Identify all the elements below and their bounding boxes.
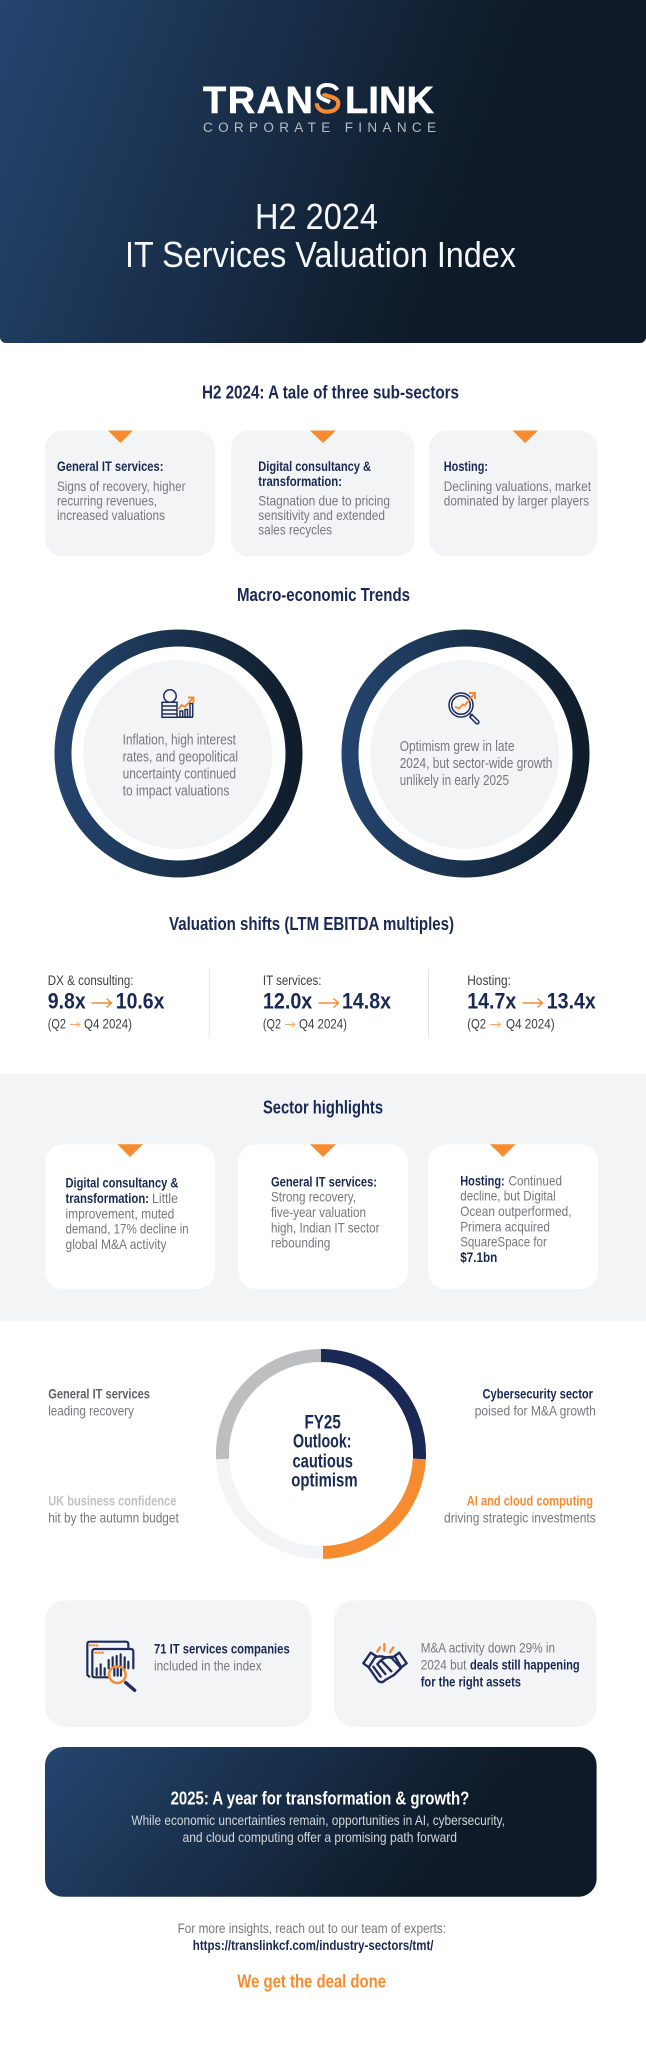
metric: DX and consulting: DX & consulting: — [48, 972, 133, 988]
panel: sub-sector cards — [45, 430, 598, 556]
icon: chart windows with magnifier — [87, 1642, 135, 1690]
text: donut centre — [291, 1412, 358, 1492]
card: digital consultancy: Stagnation due to pricing — [258, 492, 390, 508]
metric: DX and consulting — [48, 972, 165, 1032]
label: cybersecurity sector: Cybersecurity sector — [482, 1386, 593, 1402]
text: M&A stat: deals still happening — [470, 1657, 580, 1673]
label: general IT services: leading recovery — [48, 1402, 134, 1418]
card: general IT services: recurring revenues, — [57, 492, 157, 508]
card: digital consultancy: sensitivity and extended — [258, 507, 385, 523]
panel: valuation multiples — [48, 969, 596, 1038]
card: general IT highlight: rebounding — [271, 1235, 330, 1251]
text: donut centre: cautious — [292, 1450, 353, 1472]
card: general IT services: increased valuations — [57, 507, 165, 523]
tagline: We get the deal done — [237, 1972, 386, 1992]
metric: IT services: (Q2 — [263, 1016, 281, 1032]
text: 2025 body: and cloud computing offer a promising path forward — [182, 1829, 457, 1845]
panel: 2025 call to action — [45, 1747, 597, 1897]
text: contact: https://translinkcf.com/industry-sectors/tmt/ — [193, 1937, 434, 1953]
text: optimism: 2024, but sector-wide growth — [400, 756, 552, 772]
logo: Translink Corporate Finance: LINK — [345, 80, 435, 122]
card: hosting highlight: Ocean outperformed, — [460, 1203, 572, 1219]
label: cybersecurity sector — [475, 1386, 596, 1418]
metric: hosting: 13.4x — [547, 989, 596, 1014]
metric: IT services: IT services: — [263, 972, 321, 988]
card: digital consultancy highlight: Digital consultancy & — [66, 1175, 178, 1191]
metric: hosting: Q4 2024) — [506, 1016, 555, 1032]
card: hosting highlight: Primera acquired — [460, 1218, 550, 1234]
heading: valuation shifts: Valuation shifts (LTM EBITDA multiples) — [169, 914, 454, 934]
text: M&A stat: for the right assets — [421, 1674, 521, 1690]
card: general IT services: Signs of recovery, higher — [57, 478, 186, 494]
text: contact: For more insights, reach out to our team of experts: — [178, 1920, 446, 1936]
heading: macro-economic trends: Macro-economic Trends — [237, 585, 410, 605]
label: general IT services: General IT services — [48, 1386, 150, 1402]
panel: M&A activity stat — [334, 1600, 597, 1727]
card: hosting: Hosting: — [444, 458, 488, 474]
card: general IT services: General IT services: — [57, 458, 164, 474]
card: general IT highlight: five-year valuation — [271, 1204, 366, 1220]
label: UK business confidence: hit by the autumn budget — [48, 1510, 179, 1526]
title — [125, 196, 516, 275]
text: M&A stat — [421, 1640, 580, 1690]
panel: macro circle left — [63, 638, 294, 869]
logo: Translink Corporate Finance: TRAN — [203, 80, 313, 122]
logo: Translink Corporate Finance — [203, 80, 436, 135]
card: digital consultancy — [231, 430, 414, 556]
text: inflation: to impact valuations — [123, 783, 229, 799]
panel: header banner — [0, 0, 646, 343]
card: hosting: Declining valuations, market — [444, 478, 591, 494]
metric: IT services: 12.0x — [263, 989, 313, 1014]
text: companies stat — [154, 1641, 290, 1674]
heading: tale of three sub-sectors: H2 2024: A tale of three sub-sectors — [202, 382, 459, 402]
panel: companies stat — [45, 1600, 312, 1727]
icon: handshake — [363, 1644, 407, 1682]
label: AI and cloud computing: driving strategic investments — [444, 1510, 596, 1526]
text: inflation: Inflation, high interest — [123, 732, 236, 748]
metric: DX and consulting: Q4 2024) — [84, 1016, 132, 1032]
card: hosting highlight: Continued — [508, 1172, 562, 1188]
text: inflation — [123, 732, 238, 799]
label: UK business confidence — [48, 1493, 179, 1526]
card: hosting highlight: $7.1bn — [460, 1249, 497, 1265]
panel: macro circle right — [350, 638, 581, 869]
icon: magnifier with growth arrow — [449, 693, 479, 724]
text: inflation: uncertainty continued — [123, 766, 236, 782]
text: optimism: Optimism grew in late — [400, 739, 514, 755]
card: digital consultancy highlight: global M&A activity — [66, 1236, 166, 1252]
label: general IT services — [48, 1386, 150, 1418]
text: donut centre: FY25 — [304, 1412, 341, 1434]
chart: FY25 outlook donut — [222, 1356, 420, 1553]
text: companies stat: 71 IT services companies — [154, 1641, 290, 1657]
heading: 2025: 2025: A year for transformation & growth? — [171, 1788, 469, 1808]
card: hosting — [429, 430, 598, 556]
card: hosting highlight: Hosting: — [460, 1172, 505, 1188]
card: hosting highlight — [428, 1144, 598, 1289]
label: AI and cloud computing — [444, 1493, 596, 1526]
card: general IT highlight: high, Indian IT sector — [271, 1219, 380, 1235]
text: contact — [178, 1920, 446, 1953]
card: general IT highlight: General IT services: — [271, 1173, 377, 1189]
text: 2025 body: While economic uncertainties remain, opportunities in AI, cybersecurity, — [131, 1812, 505, 1828]
text: 2025 body — [131, 1812, 505, 1845]
metric: IT services — [263, 972, 392, 1032]
text: inflation: rates, and geopolitical — [123, 749, 238, 765]
card: general IT highlight: Strong recovery, — [271, 1189, 356, 1205]
card: hosting highlight: SquareSpace for — [460, 1234, 547, 1250]
card: general IT highlight — [238, 1144, 408, 1289]
metric: hosting — [467, 972, 596, 1032]
title: H2 2024 — [255, 196, 378, 237]
text: M&A stat: 2024 but — [421, 1657, 466, 1673]
card: digital consultancy highlight: improvement, muted — [66, 1205, 174, 1221]
metric: IT services: 14.8x — [342, 989, 392, 1014]
card: general IT services — [45, 430, 215, 556]
text: companies stat: included in the index — [154, 1658, 262, 1674]
card: digital consultancy: Digital consultancy & — [258, 458, 371, 474]
icon: coins and bar chart — [162, 690, 194, 717]
label: cybersecurity sector: poised for M&A growth — [475, 1402, 596, 1418]
card: hosting highlight: decline, but Digital — [460, 1188, 556, 1204]
card: digital consultancy: transformation: — [258, 473, 342, 489]
text: optimism: unlikely in early 2025 — [400, 773, 509, 789]
card: hosting: dominated by larger players — [444, 492, 589, 508]
title: IT Services Valuation Index — [125, 234, 516, 275]
card: digital consultancy: sales recycles — [258, 522, 332, 538]
label: AI and cloud computing: AI and cloud computing — [467, 1493, 593, 1509]
text: optimism — [400, 739, 552, 789]
metric: IT services: Q4 2024) — [299, 1016, 347, 1032]
metric: hosting: Hosting: — [467, 972, 511, 988]
card: digital consultancy highlight: demand, 17% decline in — [66, 1221, 189, 1237]
metric: DX and consulting: 9.8x — [48, 989, 86, 1014]
text: donut centre: Outlook: — [293, 1431, 352, 1453]
metric: hosting: (Q2 — [467, 1016, 486, 1032]
panel: sector highlights — [0, 1074, 646, 1321]
logo: Translink Corporate Finance: CORPORATE FINANCE — [203, 120, 436, 135]
metric: DX and consulting: 10.6x — [116, 989, 165, 1014]
card: digital consultancy highlight — [45, 1144, 215, 1289]
heading: sector highlights: Sector highlights — [263, 1097, 383, 1117]
text: donut centre: optimism — [291, 1470, 358, 1492]
text: M&A stat: M&A activity down 29% in — [421, 1640, 555, 1656]
card: digital consultancy highlight: Little — [152, 1190, 178, 1206]
metric: DX and consulting: (Q2 — [48, 1016, 66, 1032]
label: UK business confidence: UK business confidence — [48, 1493, 177, 1509]
metric: hosting: 14.7x — [467, 989, 517, 1014]
card: digital consultancy highlight: transformation: — [66, 1190, 149, 1206]
